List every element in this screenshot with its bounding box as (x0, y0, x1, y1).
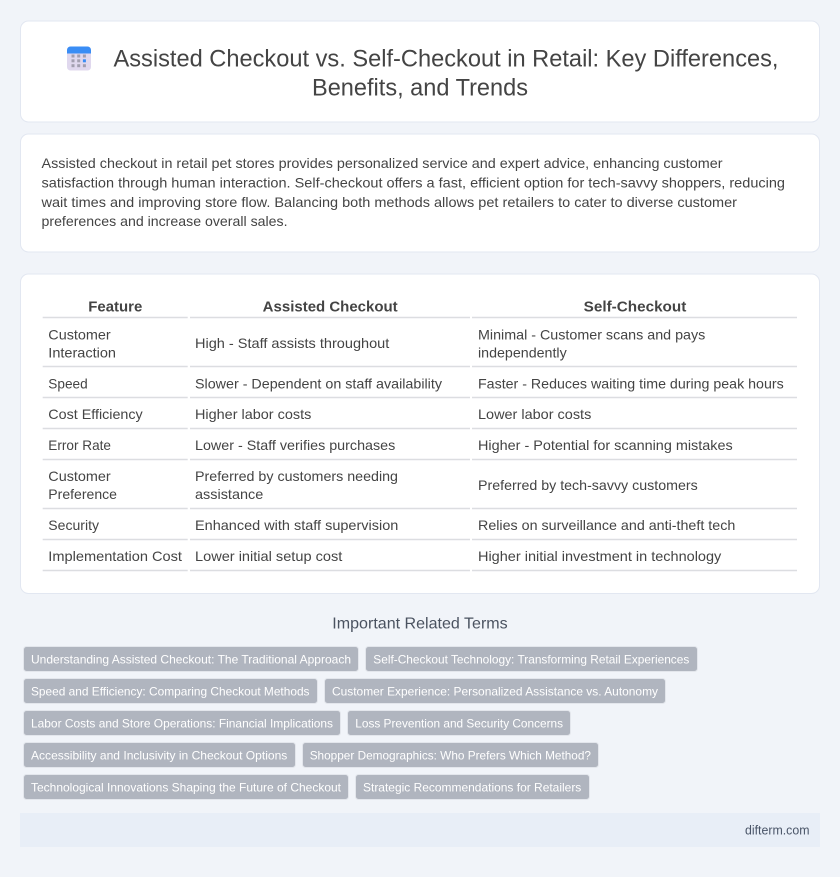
tag: Technological Innovations Shaping the Future of Checkout (31, 780, 342, 794)
text block: introduction: satisfaction through human interaction. Self-checkout offers a fast, efficient option for tech-savvy shoppers, reducing (42, 174, 785, 190)
tag (302, 742, 598, 768)
tag (24, 742, 296, 768)
row: customer preference: Preferred by customers needing (195, 468, 398, 484)
tag (24, 646, 358, 672)
row: speed: Slower - Dependent on staff availability (195, 375, 442, 391)
table header (88, 300, 686, 316)
row: error rate: Lower - Staff verifies purchases (195, 437, 395, 453)
row: customer interaction: High - Staff assists throughout (195, 335, 389, 351)
tag: Understanding Assisted Checkout: The Traditional Approach (31, 652, 351, 666)
row: customer preference: Customer (48, 468, 111, 484)
tag (324, 678, 666, 704)
heading: important related terms: Important Related Terms (332, 615, 508, 632)
title: Assisted Checkout vs. Self-Checkout in Retail: Key Differences, (114, 46, 778, 73)
row: implementation cost (48, 548, 721, 564)
tag: Accessibility and Inclusivity in Checkout Options (31, 748, 287, 762)
tag (356, 774, 590, 800)
row: cost efficiency: Lower labor costs (478, 406, 591, 422)
row: customer preference: Preference (48, 486, 117, 502)
tag (24, 774, 348, 800)
tag (348, 710, 570, 736)
row: error rate: Error Rate (48, 437, 111, 453)
row: customer interaction: independently (478, 344, 567, 360)
tag: Speed and Efficiency: Comparing Checkout Methods (31, 684, 310, 698)
row: customer preference (48, 468, 698, 502)
footer: difterm.com (745, 823, 810, 837)
text block: introduction: wait times and improving store flow. Balancing both methods allows pet retailers to cater to diverse customer (40, 194, 737, 210)
table header: Feature (88, 300, 142, 316)
row: cost efficiency: Higher labor costs (195, 406, 311, 422)
panel: related term tags (24, 646, 698, 800)
footer (20, 813, 820, 847)
row: customer preference: Preferred by tech-savvy customers (478, 477, 698, 493)
tag: Loss Prevention and Security Concerns (355, 716, 563, 730)
row: implementation cost: Higher initial investment in technology (478, 548, 721, 564)
text block: introduction: Assisted checkout in retail pet stores provides personalized service and expert advice, enhancing customer (42, 155, 723, 171)
row: security (48, 517, 735, 533)
tag: Self-Checkout Technology: Transforming Retail Experiences (373, 652, 689, 666)
row: customer interaction (48, 326, 705, 360)
tag: Customer Experience: Personalized Assistance vs. Autonomy (332, 684, 658, 698)
row: cost efficiency: Cost Efficiency (48, 406, 143, 422)
row: security: Relies on surveillance and anti-theft tech (478, 517, 735, 533)
table header: Assisted Checkout (263, 300, 398, 316)
row: customer interaction: Minimal - Customer scans and pays (478, 326, 705, 342)
title (114, 46, 778, 102)
row: speed: Faster - Reduces waiting time during peak hours (478, 375, 784, 391)
tag: Labor Costs and Store Operations: Financial Implications (31, 716, 333, 730)
row: cost efficiency (48, 406, 591, 422)
row: implementation cost: Lower initial setup cost (195, 548, 342, 564)
tag: Shopper Demographics: Who Prefers Which Method? (310, 748, 591, 762)
row: customer interaction: Interaction (48, 344, 116, 360)
table header: Self-Checkout (584, 300, 686, 316)
text block: introduction (40, 155, 785, 229)
tag (24, 678, 318, 704)
row: implementation cost: Implementation Cost (48, 548, 182, 564)
row: speed: Speed (48, 375, 88, 391)
row: security: Security (48, 517, 99, 533)
icon: calendar (67, 46, 91, 70)
tag (366, 646, 698, 672)
row: error rate (48, 437, 733, 453)
row: speed (48, 375, 784, 391)
tag: Strategic Recommendations for Retailers (363, 780, 581, 794)
tag (24, 710, 340, 736)
text block: introduction: preferences and increase overall sales. (42, 213, 288, 229)
panel: header (20, 21, 820, 122)
row: customer interaction: Customer (48, 326, 111, 342)
panel: comparison table (20, 274, 820, 594)
row: error rate: Higher - Potential for scanning mistakes (478, 437, 733, 453)
panel: introduction (20, 134, 820, 252)
row: customer preference: assistance (195, 486, 264, 502)
title: Benefits, and Trends (312, 74, 528, 102)
row: security: Enhanced with staff supervision (195, 517, 398, 533)
